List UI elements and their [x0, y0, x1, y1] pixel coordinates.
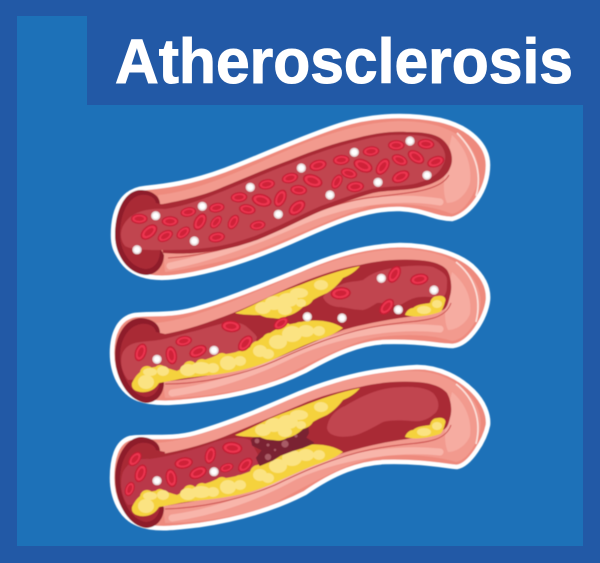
red blood cells — [123, 441, 255, 498]
white blood cells — [152, 274, 439, 364]
artery wall — [112, 367, 488, 528]
lower plaque — [132, 320, 343, 392]
lumen — [158, 132, 452, 254]
white blood cells — [152, 467, 219, 485]
right plaque — [405, 296, 446, 316]
artery 3: blood clot blockage — [112, 367, 488, 528]
vessel opening — [115, 437, 165, 528]
red blood cells — [131, 138, 446, 245]
title: Atherosclerosis — [115, 27, 573, 97]
right plaque — [405, 418, 446, 438]
artery 1: healthy — [113, 116, 488, 278]
artery wall — [112, 245, 488, 403]
lower plaque — [132, 444, 343, 516]
upper plaque — [235, 266, 360, 319]
vessel opening — [115, 318, 165, 403]
white blood cells — [132, 136, 432, 254]
vessel opening — [115, 190, 165, 275]
lumen — [157, 260, 451, 382]
blood clot — [252, 423, 313, 465]
lumen — [157, 382, 451, 507]
lumen highlight right — [323, 266, 447, 310]
lumen highlight — [121, 135, 445, 250]
lumen highlight left — [121, 438, 262, 505]
red blood cells — [132, 263, 429, 365]
lumen highlight left — [121, 322, 257, 380]
upper plaque — [235, 388, 360, 441]
artery wall — [113, 116, 488, 278]
artery 2: plaque buildup — [112, 245, 488, 403]
lumen highlight right — [327, 387, 438, 437]
